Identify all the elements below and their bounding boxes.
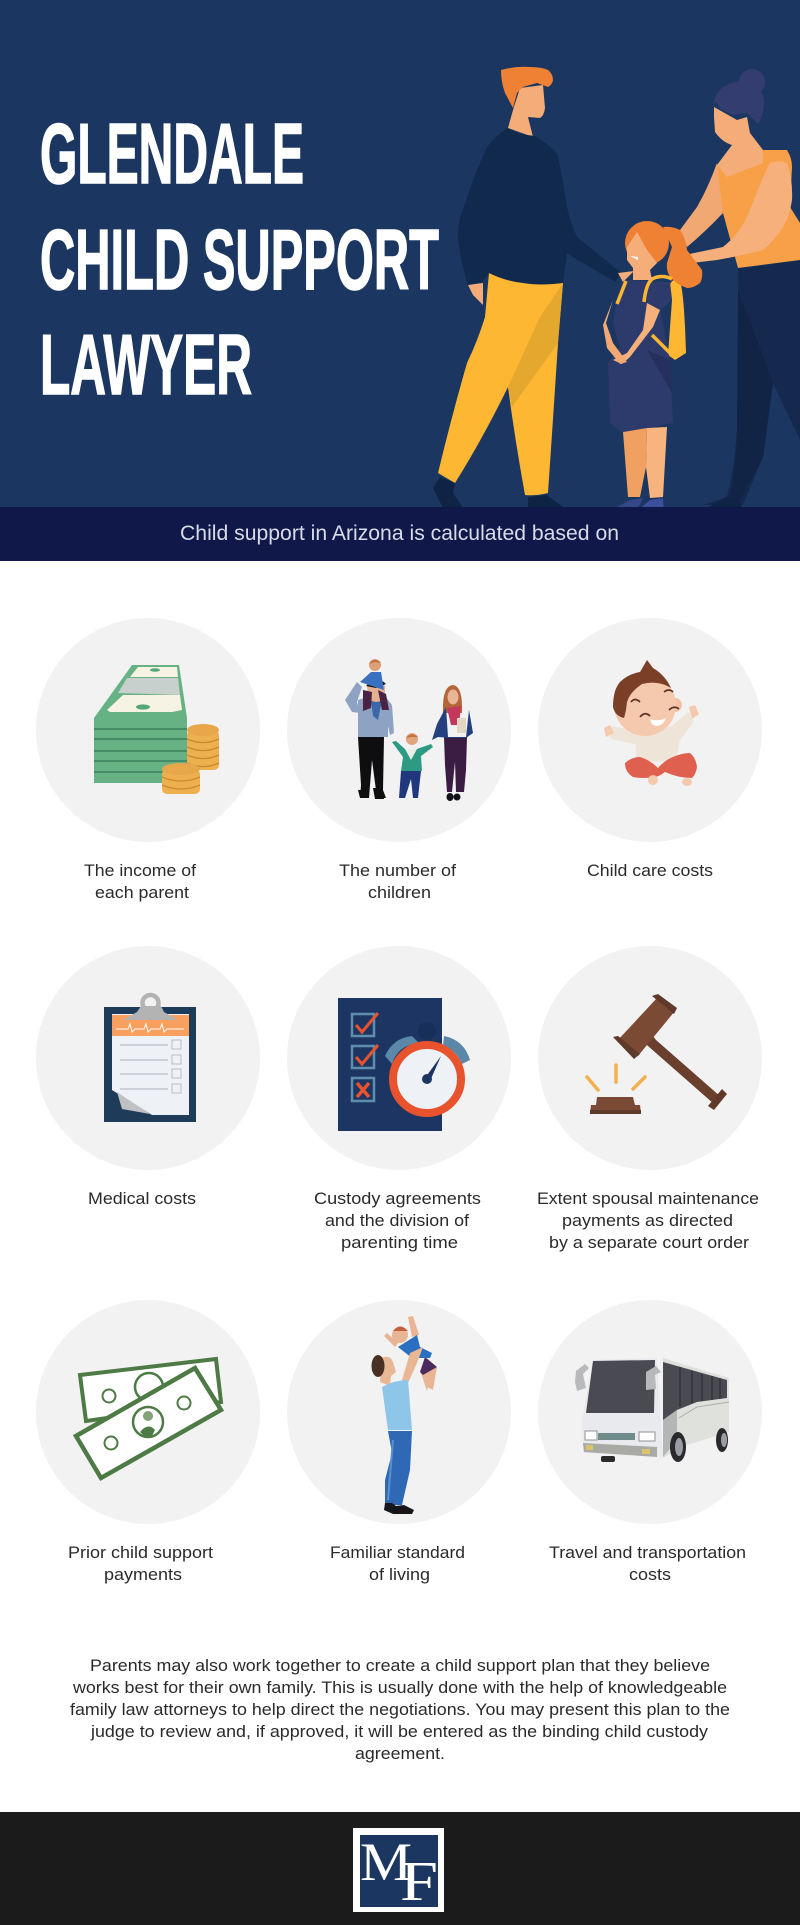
icon: bus (575, 1358, 729, 1462)
label: payments as directed (562, 1211, 733, 1230)
closing paragraph: agreement. (355, 1744, 445, 1763)
label: Familiar standard (330, 1543, 465, 1562)
title (40, 107, 439, 413)
icon: dollar bills (76, 1359, 221, 1478)
subtitle band: Child support in Arizona is calculated based on (180, 522, 619, 545)
label: costs (629, 1565, 671, 1584)
panel: number of children (287, 618, 511, 902)
icon: baby (604, 660, 699, 786)
closing paragraph (70, 1656, 730, 1763)
icon: checklist and alarm clock (338, 998, 470, 1131)
panel: travel and transportation (538, 1300, 762, 1584)
panel: familiar standard of living (287, 1300, 511, 1584)
closing paragraph: judge to review and, if approved, it will be entered as the binding child custody (90, 1722, 709, 1741)
icon: gavel (587, 994, 727, 1114)
label: children (368, 883, 431, 902)
panel: custody agreements (287, 946, 511, 1252)
subtitle band (0, 507, 800, 561)
label (339, 861, 456, 902)
panel: income of each parent (36, 618, 260, 902)
label (68, 1543, 213, 1584)
icon: money stack and coins (94, 665, 219, 794)
title: CHILD SUPPORT (40, 213, 439, 308)
label: of living (369, 1565, 430, 1584)
header panel (0, 0, 800, 561)
illustration: man (433, 67, 620, 510)
label: Travel and transportation (549, 1543, 746, 1562)
panel: medical costs (36, 946, 260, 1208)
panel: child care costs (538, 618, 762, 880)
illustration: girl (603, 221, 702, 512)
illustration: woman (675, 69, 800, 510)
label: Prior child support (68, 1543, 213, 1562)
panel: spousal maintenance (537, 946, 762, 1252)
label (84, 861, 196, 902)
title: LAWYER (40, 318, 252, 413)
logo: M (360, 1832, 412, 1892)
label: payments (104, 1565, 182, 1584)
icon: clipboard (104, 995, 196, 1122)
closing paragraph: works best for their own family. This is usually done with the help of knowledgeable (72, 1678, 727, 1697)
label: The income of (84, 861, 196, 880)
label: each parent (95, 883, 189, 902)
logo: F (400, 1851, 438, 1913)
label: Extent spousal maintenance (537, 1189, 759, 1208)
title: GLENDALE (40, 107, 304, 202)
label: by a separate court order (549, 1233, 749, 1252)
label: The number of (339, 861, 456, 880)
label (537, 1189, 759, 1252)
label: parenting time (341, 1233, 458, 1252)
icon: family (345, 659, 473, 801)
footer (0, 1812, 800, 1925)
closing paragraph: Parents may also work together to create a child support plan that they believe (90, 1656, 710, 1675)
closing paragraph: family law attorneys to help direct the negotiations. You may present this plan to the (70, 1700, 730, 1719)
label (330, 1543, 465, 1584)
logo (353, 1828, 444, 1913)
label (314, 1189, 481, 1252)
label: Custody agreements (314, 1189, 481, 1208)
icon: father lifting child (372, 1316, 437, 1514)
label: Medical costs (88, 1189, 196, 1208)
label: and the division of (325, 1211, 469, 1230)
label (549, 1543, 746, 1584)
label: Child care costs (587, 861, 713, 880)
panel: prior child support payments (36, 1300, 260, 1584)
